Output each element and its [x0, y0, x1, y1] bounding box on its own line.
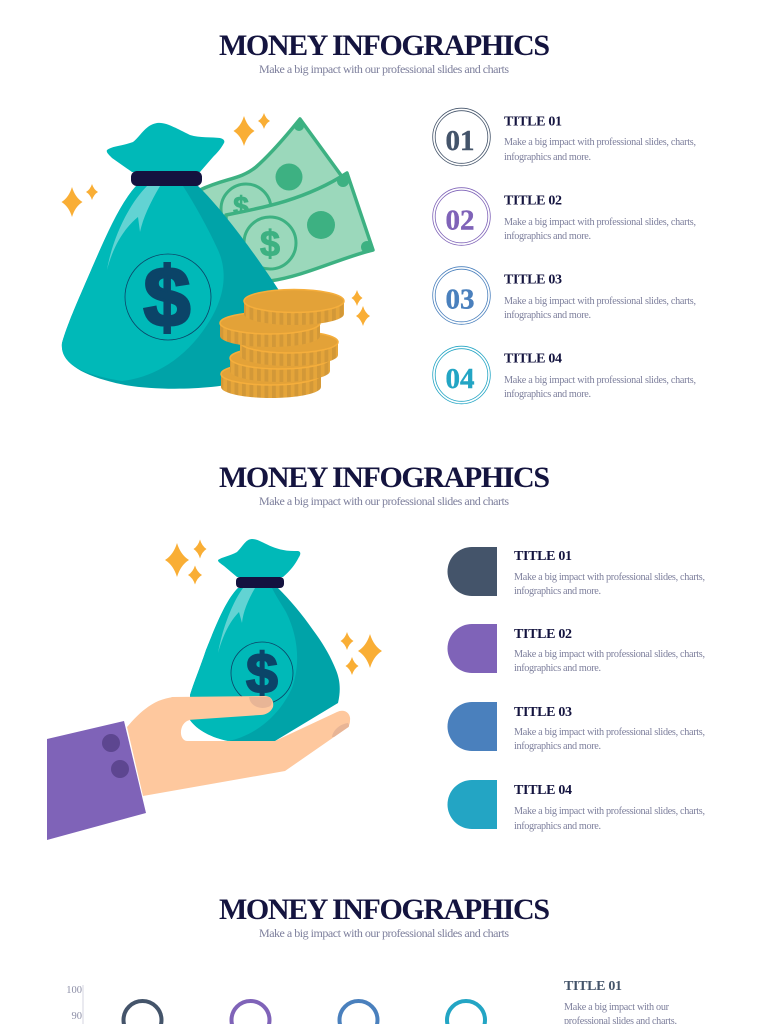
item 02: TITLE 02 [514, 627, 572, 642]
icon: hand palm [127, 697, 350, 796]
icon: sleeve [47, 721, 146, 840]
subtitle: Make a big impact with our professional slides and charts [259, 494, 509, 508]
item 02: infographics and more. [514, 663, 601, 674]
item 01: 01 [446, 125, 474, 157]
icon: sparkles [165, 540, 382, 675]
item 03: TITLE 03 [504, 272, 562, 288]
item 04 [448, 780, 705, 832]
item 02: infographics and more. [504, 231, 591, 242]
icon: money bag [190, 539, 340, 741]
illustration: hand holding money bag [47, 539, 382, 840]
item 04: infographics and more. [504, 389, 591, 400]
item 04: 04 [446, 363, 474, 395]
icon: back banknote [200, 119, 350, 280]
chart legend item: Make a big impact with our [564, 1002, 670, 1013]
item 03: infographics and more. [504, 310, 591, 321]
title: MONEY INFOGRAPHICS [219, 29, 550, 62]
item 03: Make a big impact with professional slides, charts, [514, 727, 705, 738]
icon: front banknote [225, 173, 373, 289]
ring 2 [232, 1001, 270, 1024]
ring 1 [124, 1001, 162, 1024]
item 04 [433, 346, 696, 404]
item 01: Make a big impact with professional slides, charts, [504, 137, 696, 148]
icon: front banknote: $ [260, 223, 280, 264]
item 03: Make a big impact with professional slides, charts, [504, 296, 696, 307]
item 01: infographics and more. [504, 152, 591, 163]
illustration: money bag with bills and coins [62, 113, 373, 398]
section 3 heading [219, 893, 550, 940]
item 01: infographics and more. [514, 586, 601, 597]
icon: sparkles [62, 113, 370, 326]
y axis [66, 985, 83, 1024]
item 02 [448, 624, 705, 674]
item 01 [448, 547, 705, 597]
item 01 [433, 108, 696, 166]
icon: money bag [62, 123, 282, 389]
item 02: TITLE 02 [504, 194, 562, 208]
item 04: TITLE 04 [504, 352, 562, 366]
item 01: TITLE 01 [514, 549, 572, 564]
item 03 [448, 702, 705, 752]
subtitle: Make a big impact with our professional slides and charts [259, 62, 509, 76]
icon: back banknote: $ [233, 191, 249, 222]
item 04: TITLE 04 [514, 783, 572, 798]
item 03: TITLE 03 [514, 705, 572, 720]
y axis: 100 [66, 985, 82, 996]
title: MONEY INFOGRAPHICS [219, 893, 550, 926]
item 04: Make a big impact with professional slides, charts, [514, 806, 705, 817]
item 02: 02 [446, 204, 474, 236]
item 04: infographics and more. [514, 821, 601, 832]
chart legend item: TITLE 01 [564, 979, 622, 994]
icon: coin stack [220, 290, 344, 398]
item 01: TITLE 01 [504, 114, 562, 130]
item 04: Make a big impact with professional slides, charts, [504, 375, 696, 386]
tab list [448, 547, 705, 832]
chart legend item [564, 979, 677, 1024]
subtitle: Make a big impact with our professional slides and charts [259, 926, 509, 940]
chart: ring columns [66, 985, 485, 1024]
item 02: Make a big impact with professional slides, charts, [514, 649, 705, 660]
icon: money bag: $ [144, 250, 190, 344]
ring 3 [340, 1001, 378, 1024]
item 03: infographics and more. [514, 741, 601, 752]
item 02: Make a big impact with professional slides, charts, [504, 217, 696, 228]
item 03 [433, 267, 696, 324]
icon: fingers [155, 696, 349, 737]
section 1 heading [219, 29, 550, 76]
y axis: 90 [72, 1011, 82, 1022]
numbered list [433, 108, 696, 404]
section 2 heading [219, 461, 550, 508]
title: MONEY INFOGRAPHICS [219, 461, 550, 494]
item 01: Make a big impact with professional slides, charts, [514, 572, 705, 583]
item 02 [433, 188, 696, 245]
icon: money bag: $ [246, 642, 278, 706]
ring 4 [447, 1001, 485, 1024]
item 03: 03 [446, 284, 474, 316]
